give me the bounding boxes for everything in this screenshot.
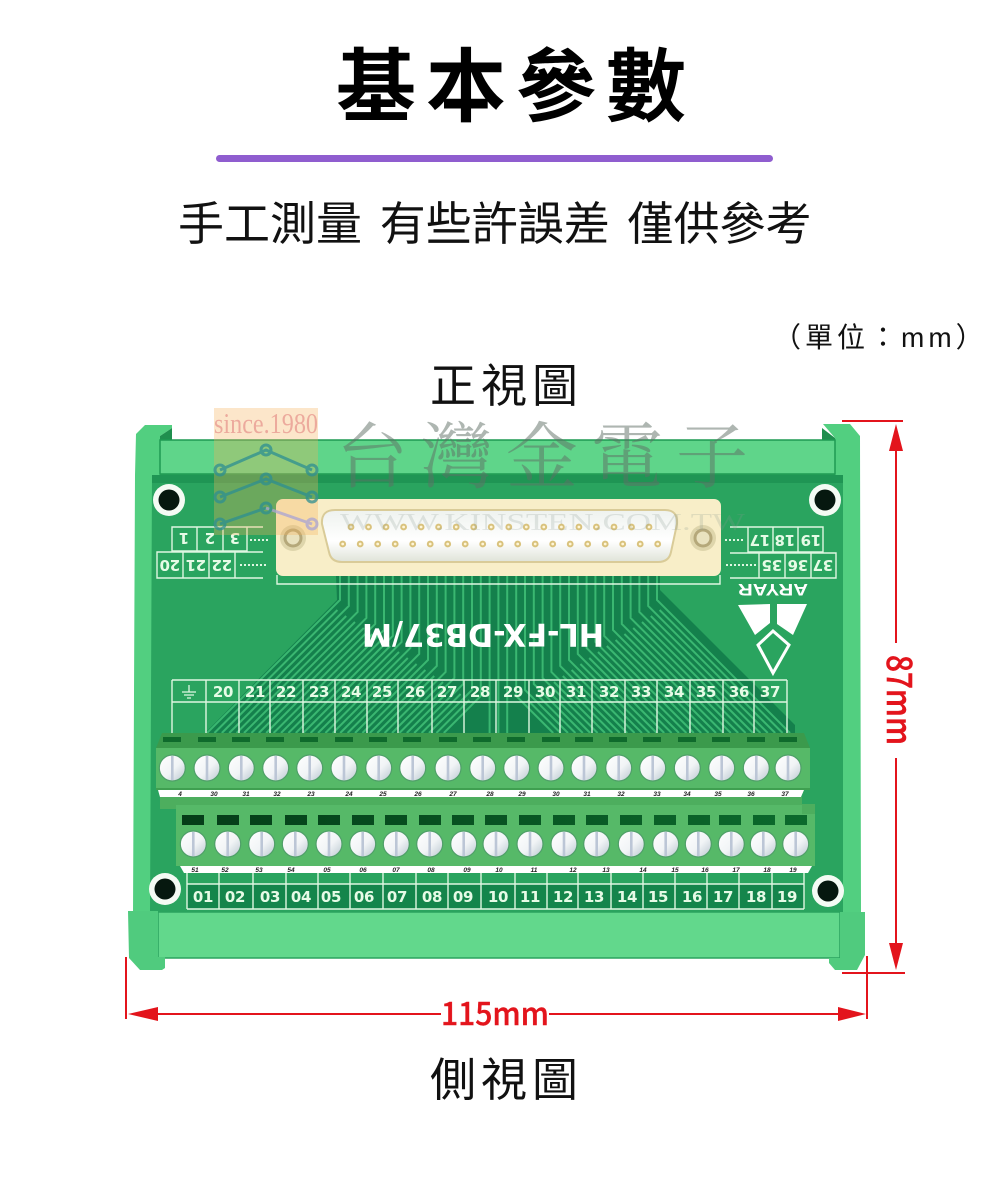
lower number table: 11: [520, 888, 540, 906]
left side rail: [133, 425, 172, 914]
screws lower: [180, 831, 809, 857]
unit note: （單位：mm）: [773, 322, 988, 353]
lower number table: 01: [193, 888, 213, 906]
board body: [150, 474, 845, 914]
label strip lower: 18: [763, 867, 771, 874]
label strip upper: 4: [177, 791, 182, 798]
lower number table: [187, 873, 804, 909]
label strip lower: 52: [221, 867, 229, 874]
label strip lower: 16: [701, 867, 709, 874]
lower number table: 17: [713, 888, 733, 906]
heading: side view: 側視圖: [430, 1054, 583, 1106]
upper number table: 36: [729, 683, 749, 701]
wire slots lower: [182, 815, 807, 825]
upper number table: 35: [696, 683, 716, 701]
db37 connector plate: [276, 499, 721, 576]
label strip upper: 35: [714, 791, 722, 798]
heading: front view: 正視圖: [430, 360, 583, 412]
label strip upper: 28: [485, 791, 494, 798]
label strip upper: 31: [583, 791, 591, 798]
lower number table: 03: [260, 888, 280, 906]
label strip upper: 23: [306, 791, 315, 798]
dimension: width 115mm: [126, 956, 867, 1034]
connector outline: [277, 575, 720, 584]
model text: HL-FX-DB37/M: [362, 616, 604, 652]
upper number table: 37: [760, 683, 780, 701]
pin map right: 36: [788, 556, 808, 574]
lower number table: 06: [354, 888, 374, 906]
lower number table: 12: [553, 888, 573, 906]
label strip lower: 08: [427, 867, 435, 874]
label strip lower: [180, 866, 812, 874]
label strip upper: 30: [210, 791, 218, 798]
upper number table: 23: [309, 683, 329, 701]
label strip upper: 34: [683, 791, 691, 798]
lower number table: 09: [453, 888, 473, 906]
label strip upper: 25: [378, 791, 387, 798]
label strip upper: 32: [617, 791, 625, 798]
upper number table: 33: [631, 683, 651, 701]
dimension: height 87mm: [842, 421, 926, 973]
pin map right: [725, 527, 836, 578]
upper number table: [172, 680, 787, 733]
lower number table: 07: [387, 888, 407, 906]
label strip lower: 19: [789, 867, 797, 874]
upper number table: 21: [245, 683, 265, 701]
upper number table: 28: [470, 683, 490, 701]
upper number table: 27: [437, 683, 457, 701]
purple divider: [216, 155, 773, 162]
right side rail: [823, 424, 861, 914]
lower number table: 14: [617, 888, 637, 906]
label strip upper: 24: [344, 791, 353, 798]
upper number table: 26: [405, 683, 425, 701]
dimension: height 87mm: 87mm: [877, 655, 926, 745]
bottom right foot: [829, 912, 865, 970]
watermark: company name: 台灣金電子: [336, 418, 761, 498]
label strip upper: 32: [273, 791, 281, 798]
connector pins: [339, 524, 661, 547]
label strip upper: 27: [448, 791, 457, 798]
upper number table: 25: [372, 683, 392, 701]
label strip upper: [158, 790, 804, 798]
board shadow band: [152, 475, 843, 483]
upper number table: 20: [213, 683, 233, 701]
label strip upper: 30: [552, 791, 560, 798]
label strip upper: 33: [653, 791, 661, 798]
lower number table: 18: [746, 888, 766, 906]
upper number table: 32: [599, 683, 619, 701]
upper terminal block: [156, 733, 810, 809]
upper number table: 30: [535, 683, 555, 701]
watermark: website: WWW.KINSTEN.COM.TW: [340, 510, 746, 536]
upper number table: 22: [276, 683, 296, 701]
upper number table: 31: [566, 683, 586, 701]
pin map right: 35: [762, 556, 782, 574]
pin map left: 22: [212, 556, 232, 574]
label strip lower: 13: [602, 867, 610, 874]
left notch: [160, 428, 172, 440]
lower number table: 19: [777, 888, 797, 906]
label strip upper: 26: [413, 791, 422, 798]
title: 基本參數: [336, 23, 696, 139]
subtitle: 手工測量 有些許誤差 僅供參考: [178, 198, 812, 250]
pin map right: 37: [813, 556, 833, 574]
pin map left: 21: [186, 556, 206, 574]
label strip lower: 53: [255, 867, 263, 874]
pin map left: 20: [160, 556, 180, 574]
screws upper: [159, 755, 801, 781]
lower number table: 10: [488, 888, 508, 906]
dimension: width 115mm: 115mm: [441, 989, 549, 1034]
label strip upper: 29: [517, 791, 526, 798]
label strip lower: 12: [569, 867, 577, 874]
watermark logo: [214, 408, 318, 535]
pin map right: 19: [801, 531, 821, 549]
label strip lower: 09: [463, 867, 471, 874]
lower terminal block: [176, 804, 815, 874]
bottom rail: [158, 912, 840, 958]
top rail: [160, 440, 835, 474]
label strip lower: 51: [191, 867, 199, 874]
bottom left foot: [128, 911, 165, 970]
label strip lower: 54: [287, 867, 295, 874]
pin map left: 2: [205, 529, 215, 547]
pin map left: [157, 527, 268, 578]
logo: network lines: [215, 445, 317, 529]
pin map right: 18: [775, 531, 795, 549]
label strip lower: 11: [531, 867, 538, 874]
upper number table: 29: [503, 683, 523, 701]
mounting holes: [149, 484, 844, 907]
pcb traces: [205, 576, 795, 733]
label strip lower: 17: [732, 867, 740, 874]
product: terminal board: [128, 424, 865, 970]
logo: since text: since.1980: [214, 408, 318, 440]
label strip upper: 37: [781, 791, 789, 798]
label strip lower: 10: [495, 867, 503, 874]
pin map right: 17: [750, 531, 770, 549]
pin map left: 1: [179, 529, 189, 547]
label strip upper: 36: [747, 791, 755, 798]
label strip lower: 14: [639, 867, 647, 874]
upper number table: 24: [341, 683, 361, 701]
lower number table: 02: [225, 888, 245, 906]
brand logo: aryar: [738, 580, 808, 673]
lower number table: 08: [422, 888, 442, 906]
label strip lower: 06: [359, 867, 367, 874]
pin map left: 3: [230, 529, 240, 547]
label strip upper: 31: [242, 791, 250, 798]
logo: orange panel: [214, 408, 318, 535]
lower number table: 05: [321, 888, 341, 906]
mounting bolts: [280, 525, 716, 551]
wire slots upper: [163, 737, 797, 742]
label strip lower: 15: [671, 867, 679, 874]
lower number table: 04: [291, 888, 311, 906]
label strip lower: 05: [323, 867, 331, 874]
lower number table: 15: [648, 888, 668, 906]
lower number table: 16: [682, 888, 702, 906]
brand logo: aryar: ARYAR: [738, 580, 808, 599]
lower number table: 13: [584, 888, 604, 906]
upper number table: 34: [664, 683, 684, 701]
right notch: [822, 428, 835, 440]
label strip lower: 07: [392, 867, 400, 874]
